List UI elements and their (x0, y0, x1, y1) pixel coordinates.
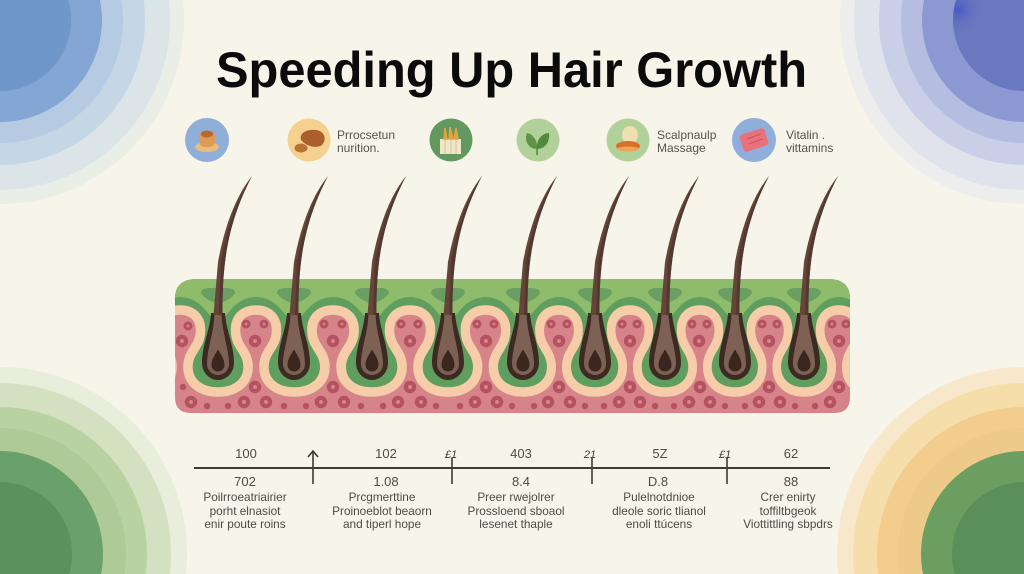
timeline column 1: porht elnasiot (210, 504, 281, 518)
label: scalp massage: Massage (657, 141, 706, 155)
corner: amber and green concentric arcs (837, 367, 1024, 574)
icon: grain bundle on green circle (430, 118, 472, 162)
timeline column 2: Prcgmerttine (349, 490, 416, 504)
icon: pastry on blue circle (185, 118, 229, 162)
timeline column 3: Preer rwejolrer (477, 490, 555, 504)
timeline column 1: 702 (234, 474, 256, 489)
label: nutrition: Prrocsetun (337, 128, 395, 142)
timeline axis (194, 451, 830, 484)
timeline column 5 (743, 446, 833, 531)
timeline column 1 (203, 446, 287, 531)
corner: indigo concentric arcs (840, 0, 1024, 204)
timeline column 5: 88 (784, 474, 798, 489)
timeline column 4: enoli ttúcens (626, 517, 692, 531)
timeline column 4: D.8 (648, 474, 668, 489)
label: vitamins: vittamins (786, 141, 833, 155)
timeline tick glyphs: 21 (583, 449, 596, 461)
timeline column 3 (467, 446, 565, 531)
icon: brown food on amber circle (288, 118, 330, 162)
icon: egg and dish on light green circle (606, 118, 650, 162)
timeline tick glyphs: £1 (444, 449, 457, 461)
timeline tick glyphs: £1 (718, 449, 731, 461)
timeline column 3: Prossloend sboaol (467, 504, 565, 518)
timeline column 4 (612, 446, 706, 531)
timeline column 2: and tiperl hope (343, 517, 421, 531)
corner: blue concentric arcs (0, 0, 184, 204)
timeline column 1: enir poute roins (204, 517, 286, 531)
timeline column 4: 5Z (652, 446, 668, 461)
timeline column 2: Proinoeblot beaorn (332, 504, 432, 518)
corner: green concentric arcs (0, 367, 187, 574)
label: vitamins: Vitalin . (786, 128, 825, 142)
timeline column 2: 102 (375, 446, 397, 461)
timeline column 5: Viottittling sbpdrs (743, 517, 833, 531)
timeline column 4: dleole soric tlianol (612, 504, 706, 518)
skin cross-section diagram (175, 279, 850, 413)
timeline column 1: 100 (235, 446, 257, 461)
icon: leaves on light green circle (516, 118, 560, 162)
label: scalp massage: Scalpnaulp (657, 128, 717, 142)
hair strands (214, 176, 838, 315)
timeline column 2: 1.08 (373, 474, 399, 489)
timeline column 5: Crer enirty (760, 490, 816, 504)
title: Speeding Up Hair Growth (216, 42, 807, 98)
timeline column 3: 8.4 (512, 474, 530, 489)
timeline column 4: Pulelnotdnioe (623, 490, 695, 504)
icon: pink block on blue circle (732, 118, 776, 162)
timeline column 1: Poilrroeatriairier (203, 490, 287, 504)
label: nutrition: nurition. (337, 141, 380, 155)
timeline column 2 (332, 446, 432, 531)
timeline column 5: 62 (784, 446, 798, 461)
timeline column 3: lesenet thaple (479, 517, 553, 531)
timeline column 3: 403 (510, 446, 532, 461)
timeline column 5: toffiltbgeok (760, 504, 817, 518)
